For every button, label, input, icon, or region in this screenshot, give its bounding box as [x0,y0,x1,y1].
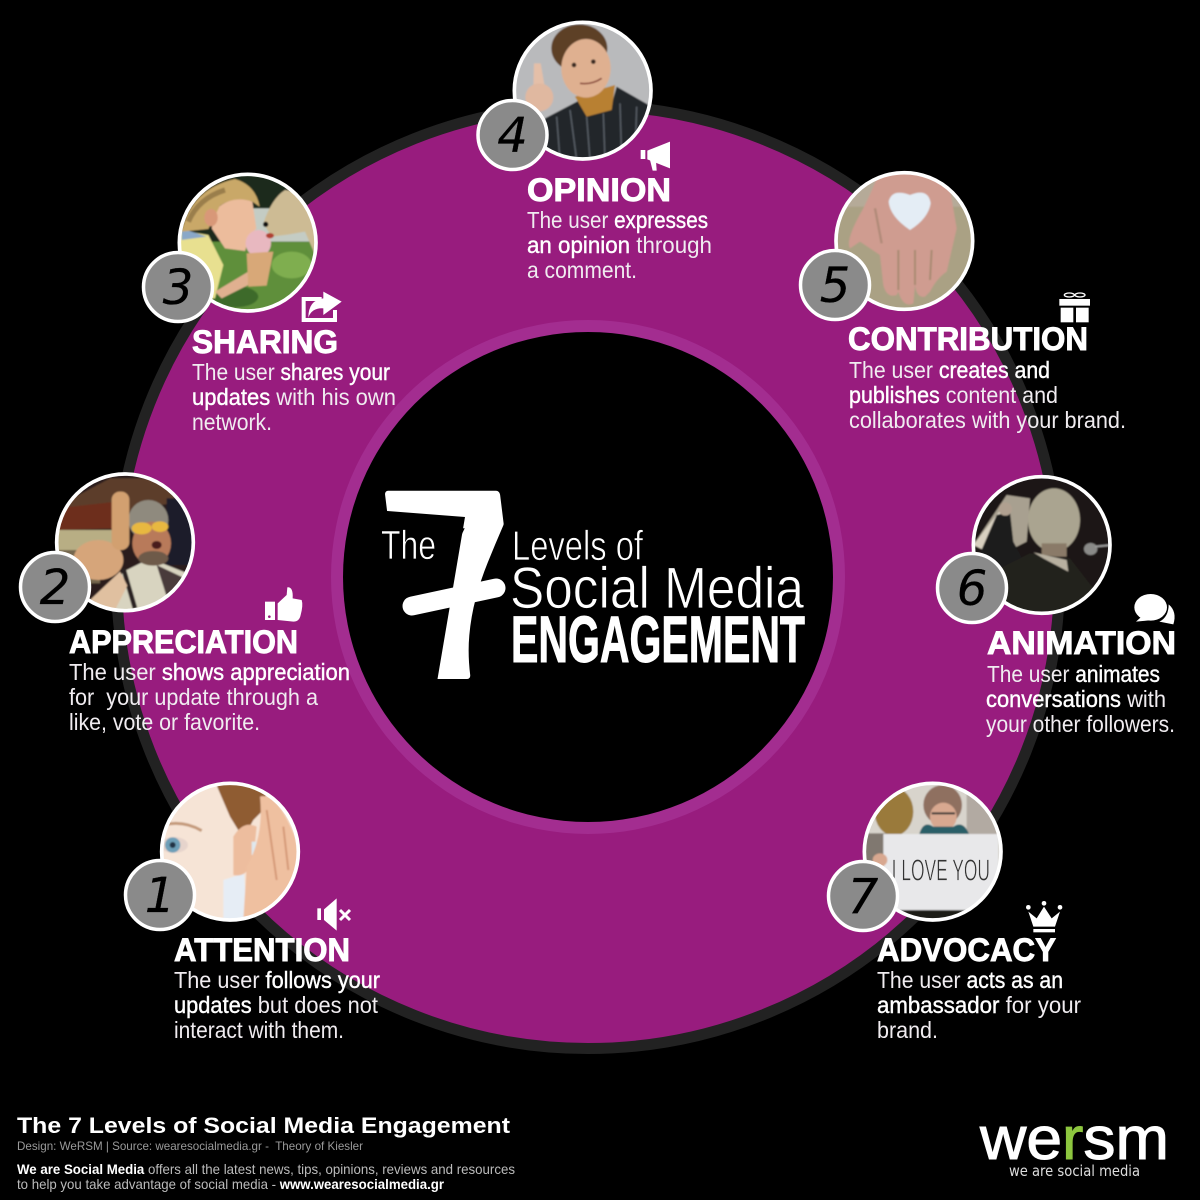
description: contribution [849,357,1126,433]
icon: megaphone [641,142,670,171]
photo: open hand holding a heart [833,170,977,313]
description: attention: updates but does not [174,992,379,1018]
title: the 7 levels of social media engagement: ENGAGEMENT [511,602,805,676]
description: appreciation: for your update through a [69,684,318,710]
photo: woman holding an I LOVE YOU sign [860,780,1007,925]
description: attention: interact with them. [174,1017,344,1043]
description: advocacy: The user acts as an [877,967,1063,993]
badge: number 7: 7 [848,869,879,925]
description: attention [174,967,380,1043]
description: animation [986,661,1175,737]
badge: number 5: 5 [820,258,850,314]
heading: sharing: SHARING [192,324,338,360]
panel: level 6 animation [938,475,1176,737]
description: animation: your other followers. [986,711,1175,737]
description: advocacy [877,967,1081,1043]
description: sharing: network. [192,409,272,435]
description: animation: conversations with [986,686,1166,712]
description: advocacy: brand. [877,1017,938,1043]
description: contribution: collaborates with your brand. [849,407,1126,433]
description: opinion: an opinion through [527,232,712,258]
description: opinion [527,207,712,283]
panel: level 1 attention [126,780,380,1043]
heading: animation: ANIMATION [987,625,1176,661]
description: sharing: The user shares your [192,359,390,385]
badge: number 1 [126,860,194,930]
badge: number 2: 2 [40,560,70,616]
heading: advocacy: ADVOCACY [877,932,1056,968]
footer: title and credits: Design: WeRSM | Source: wearesocialmedia.gr - Theory of Kiesler [17,1139,363,1153]
footer: title and credits: to help you take advantage of social media - www.wearesocialmedia.gr [17,1176,445,1192]
logo: wersm: wersm [979,1105,1169,1172]
title: the 7 levels of social media engagement: Social Media [510,556,805,621]
photo: speaker at a microphone [970,475,1113,618]
badge: number 5 [800,250,870,320]
icon: thumbs up [265,587,302,622]
panel: level 7 advocacy [828,780,1081,1043]
badge: number 7 [828,862,898,930]
badge: number 6: 6 [957,561,987,617]
icon: gift box [1059,293,1090,322]
description: opinion: The user expresses [527,207,708,233]
panel: level 2 appreciation [20,472,350,735]
logo: wersm: we are social media [1009,1162,1140,1180]
description: attention: The user follows your [174,967,380,993]
footer: title and credits: The 7 Levels of Social Media Engagement [17,1113,511,1138]
panel: level 4 opinion [478,20,712,283]
icon: share arrow [304,292,342,320]
title: the 7 levels of social media engagement: The [381,522,436,568]
description: advocacy: ambassador for your [877,992,1081,1018]
panel: level 3 sharing [144,172,396,435]
description: appreciation [69,659,350,735]
description: sharing [192,359,396,435]
icon: muted speaker [317,898,350,931]
badge: number 4 [478,100,547,170]
heading: attention: ATTENTION [174,932,350,968]
photo: man raising a finger [510,20,657,163]
photo: girl and dog sharing ice cream [175,172,318,315]
heading: contribution: CONTRIBUTION [848,321,1088,357]
panel: level 5 contribution [800,170,1126,433]
heading: opinion: OPINION [527,172,671,208]
photo: woman cupping ear [157,780,303,923]
badge: number 3 [144,252,212,322]
description: animation: The user animates [987,661,1160,687]
badge: number 4: 4 [497,108,528,164]
title: the 7 levels of social media engagement: Levels of [512,522,643,569]
central ring [116,106,1060,1048]
photo: woman holding an I LOVE YOU sign: I LOVE YOU [892,854,990,888]
badge: number 1: 1 [145,868,175,924]
footer: title and credits: We are Social Media offers all the latest news, tips, opinions, reviews and resources [17,1161,515,1177]
description: appreciation: The user shows appreciation [69,659,350,685]
icon: speech bubbles [1134,594,1175,624]
icon: crown [1026,901,1062,932]
badge: number 2 [20,552,90,622]
title: the 7 levels of social media engagement [372,438,805,731]
photo: man giving thumbs up [53,472,197,615]
description: contribution: The user creates and [849,357,1050,383]
description: sharing: updates with his own [192,384,396,410]
heading: appreciation: APPRECIATION [69,624,298,660]
footer: title and credits [17,1113,515,1192]
badge: number 6 [938,554,1006,622]
description: opinion: a comment. [527,257,637,283]
description: contribution: publishes content and [849,382,1058,408]
description: appreciation: like, vote or favorite. [69,709,260,735]
big numeral 7: 7 [372,438,536,731]
badge: number 3: 3 [163,260,193,316]
